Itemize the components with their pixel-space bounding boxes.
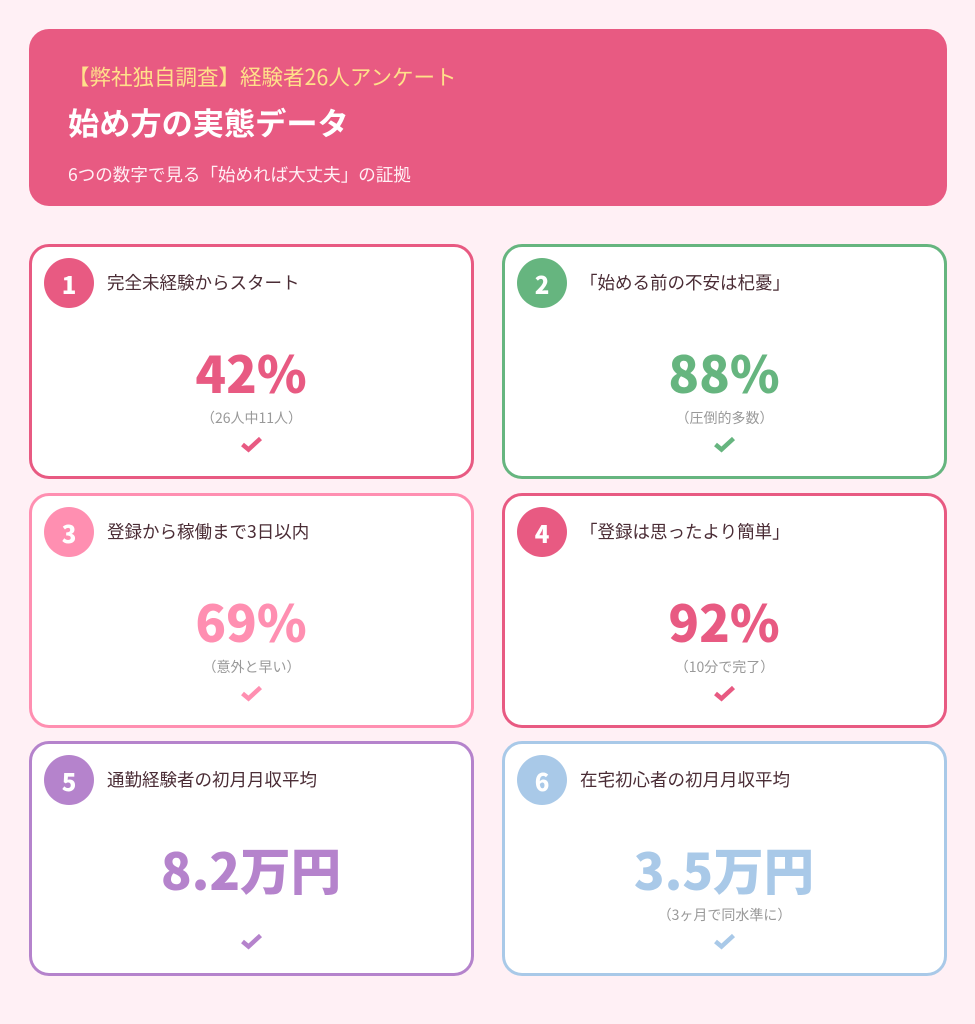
panel: card 3 [29, 493, 474, 728]
icon: check 2 [714, 437, 735, 452]
card 4 heading: 「登録は思ったより簡単」 [580, 519, 790, 544]
card 1 value: 42% [195, 334, 307, 408]
number badge 1: 1 [62, 266, 76, 301]
number badge 4: 4 [535, 515, 549, 550]
card 6 value: 3.5万円 [634, 831, 814, 905]
main title: 始め方の実態データ [68, 99, 349, 144]
number badge 5: 5 [62, 763, 76, 798]
icon: check 1 [241, 437, 262, 452]
number badge 4 [517, 507, 567, 557]
header eyebrow: 【弊社独自調査】経験者26人アンケート [68, 61, 457, 92]
panel: card 1 [29, 244, 474, 479]
card 1 note: （26人中11人） [201, 408, 302, 428]
card 2 note: （圧倒的多数） [676, 408, 774, 428]
panel: card 5 [29, 741, 474, 976]
card 3 heading: 登録から稼働まで3日以内 [107, 519, 309, 544]
panel: card 2 [502, 244, 947, 479]
card 2 value: 88% [668, 334, 780, 408]
number badge 5 [44, 755, 94, 805]
card 4 note: （10分で完了） [675, 657, 774, 677]
header banner [29, 29, 947, 206]
number badge 2: 2 [535, 266, 549, 301]
icon: check 3 [241, 686, 262, 702]
number badge 1 [44, 258, 94, 308]
card 2 heading: 「始める前の不安は杞憂」 [580, 270, 790, 295]
number badge 6 [517, 755, 567, 805]
icon: check 4 [714, 686, 735, 702]
card 6 note: （3ヶ月で同水準に） [658, 905, 791, 925]
card 5 value: 8.2万円 [161, 831, 341, 905]
card 3 note: （意外と早い） [202, 657, 300, 677]
number badge 3 [44, 507, 94, 557]
card 1 heading: 完全未経験からスタート [107, 270, 300, 295]
card 5 heading: 通勤経験者の初月月収平均 [107, 767, 317, 792]
card 4 value: 92% [668, 583, 780, 657]
panel: card 6 [502, 741, 947, 976]
card 6 heading: 在宅初心者の初月月収平均 [580, 767, 790, 792]
icon: check 5 [241, 934, 262, 950]
panel: card 4 [502, 493, 947, 728]
number badge 6: 6 [535, 763, 549, 798]
icon: check 6 [714, 934, 735, 950]
card 3 value: 69% [195, 583, 307, 657]
number badge 3: 3 [62, 515, 76, 550]
subtitle: 6つの数字で見る「始めれば大丈夫」の証拠 [68, 162, 411, 187]
number badge 2 [517, 258, 567, 308]
